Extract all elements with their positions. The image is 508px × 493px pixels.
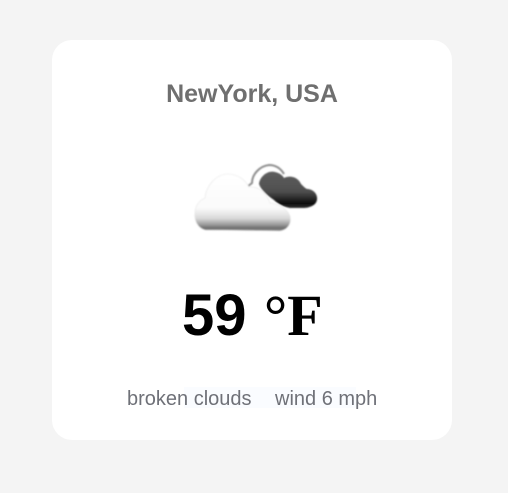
temperature (182, 283, 323, 348)
faint highlight behind conditions (184, 387, 356, 408)
panel: weather card (52, 40, 452, 440)
icon part: dark cloud (259, 172, 317, 208)
temperature number: 59 (182, 283, 247, 348)
condition text: broken clouds (127, 388, 252, 410)
icon: broken clouds (194, 163, 318, 232)
icon part: white cloud (195, 174, 290, 231)
wind text: wind 6 mph (275, 388, 377, 410)
temperature unit: °F (264, 283, 323, 348)
heading: location: NewYork, USA (166, 80, 338, 108)
icon part: sun arc (247, 165, 284, 187)
